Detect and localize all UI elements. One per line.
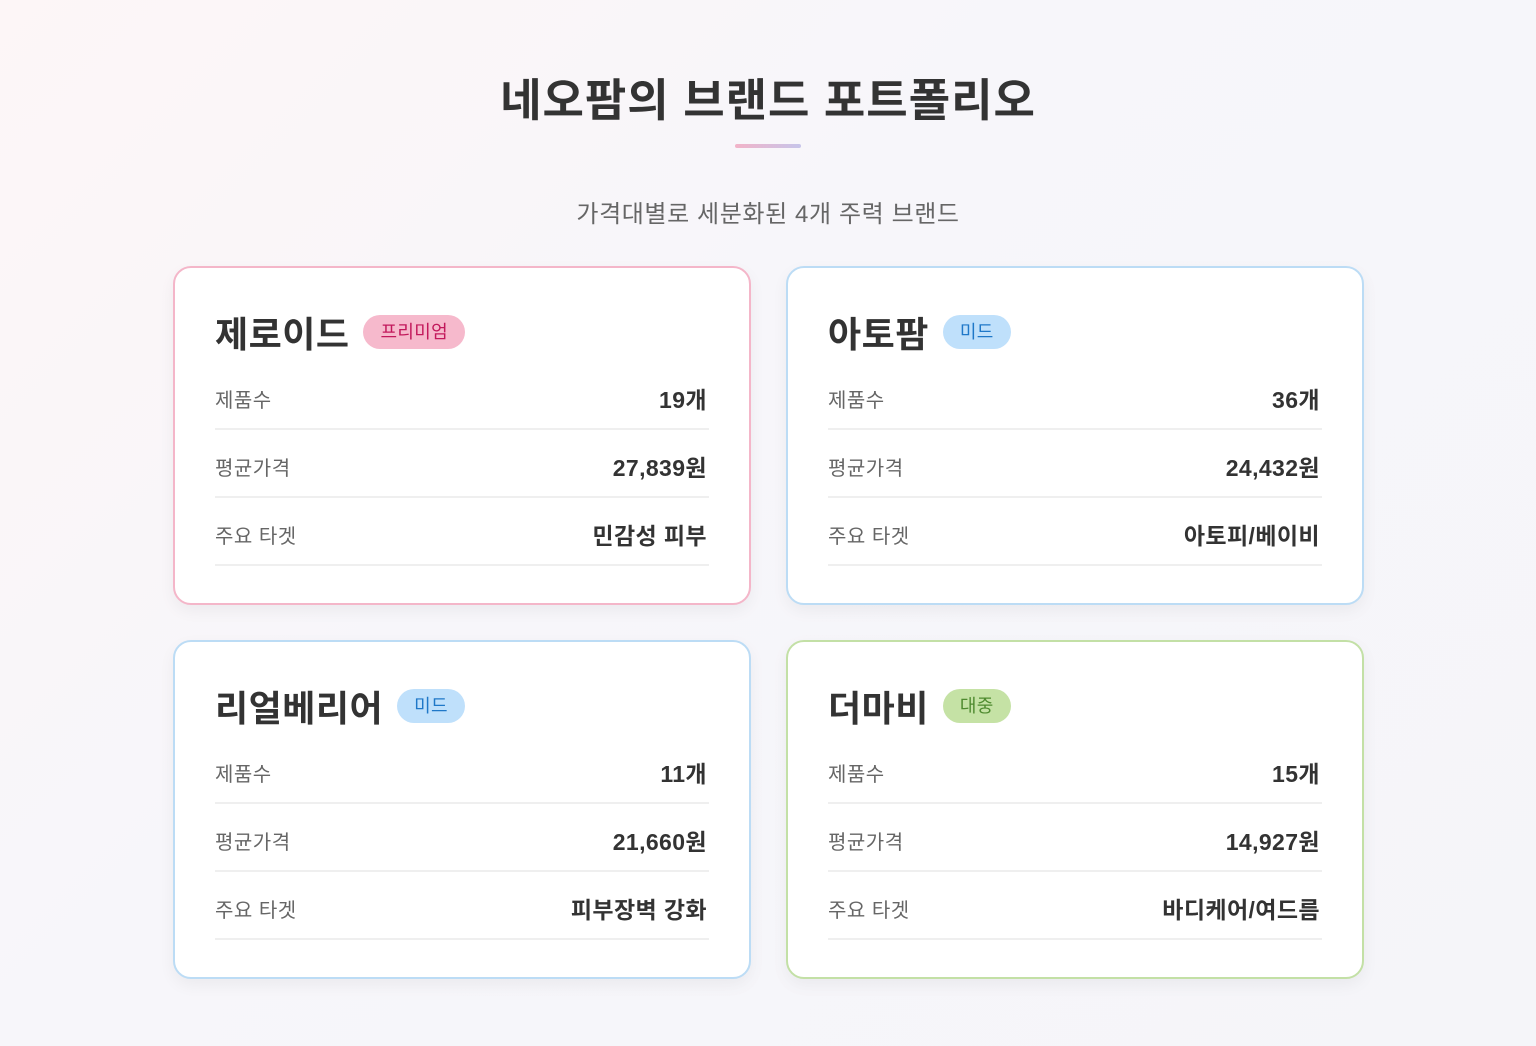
stats rows bbox=[215, 387, 709, 566]
stats rows: 아토피/베이비 bbox=[1184, 523, 1320, 549]
stats rows: 21,660원 bbox=[613, 829, 707, 855]
brand heading: 미드 bbox=[414, 696, 448, 716]
subtitle: 가격대별로 세분화된 4개 주력 브랜드 bbox=[576, 201, 960, 228]
panel: 리얼베리어 bbox=[173, 640, 751, 979]
stats rows: 19개 bbox=[659, 387, 707, 413]
brand heading: 리얼베리어 bbox=[215, 688, 383, 729]
stats rows: 제품수 bbox=[828, 764, 885, 786]
stats rows bbox=[828, 761, 1322, 940]
stats rows: 11개 bbox=[660, 761, 707, 787]
brand heading bbox=[828, 314, 1011, 355]
brand heading: 제로이드 bbox=[215, 314, 349, 355]
brand heading: 더마비 bbox=[828, 688, 929, 729]
stats rows bbox=[215, 761, 709, 940]
stats rows: 주요 타겟 bbox=[215, 526, 297, 548]
stats rows: 바디케어/여드름 bbox=[1162, 897, 1320, 923]
brand heading: 대중 bbox=[960, 696, 994, 716]
stats rows: 제품수 bbox=[215, 764, 272, 786]
title: 네오팜의 브랜드 포트폴리오 bbox=[500, 75, 1036, 126]
stats rows: 제품수 bbox=[828, 390, 885, 412]
stats rows: 피부장벽 강화 bbox=[571, 897, 707, 923]
stats rows: 제품수 bbox=[215, 390, 272, 412]
stats rows: 평균가격 bbox=[215, 458, 291, 480]
brand heading bbox=[828, 688, 1011, 729]
stats rows: 주요 타겟 bbox=[828, 900, 910, 922]
stats rows: 주요 타겟 bbox=[828, 526, 910, 548]
stats rows bbox=[828, 387, 1322, 566]
stats rows: 평균가격 bbox=[215, 832, 291, 854]
stats rows: 주요 타겟 bbox=[215, 900, 297, 922]
brand heading bbox=[215, 688, 465, 729]
stats rows: 평균가격 bbox=[828, 458, 904, 480]
panel: 아토팜 bbox=[786, 266, 1364, 605]
stats rows: 민감성 피부 bbox=[592, 523, 707, 549]
panel: 더마비 bbox=[786, 640, 1364, 979]
panel: 제로이드 bbox=[173, 266, 751, 605]
brand heading: 프리미엄 bbox=[380, 322, 448, 342]
brand heading: 아토팜 bbox=[828, 314, 929, 355]
stats rows: 평균가격 bbox=[828, 832, 904, 854]
stats rows: 27,839원 bbox=[613, 455, 707, 481]
brand heading: 미드 bbox=[960, 322, 994, 342]
stats rows: 36개 bbox=[1272, 387, 1320, 413]
stats rows: 24,432원 bbox=[1226, 455, 1320, 481]
brand heading bbox=[215, 314, 465, 355]
stats rows: 14,927원 bbox=[1226, 829, 1320, 855]
stats rows: 15개 bbox=[1272, 761, 1320, 787]
